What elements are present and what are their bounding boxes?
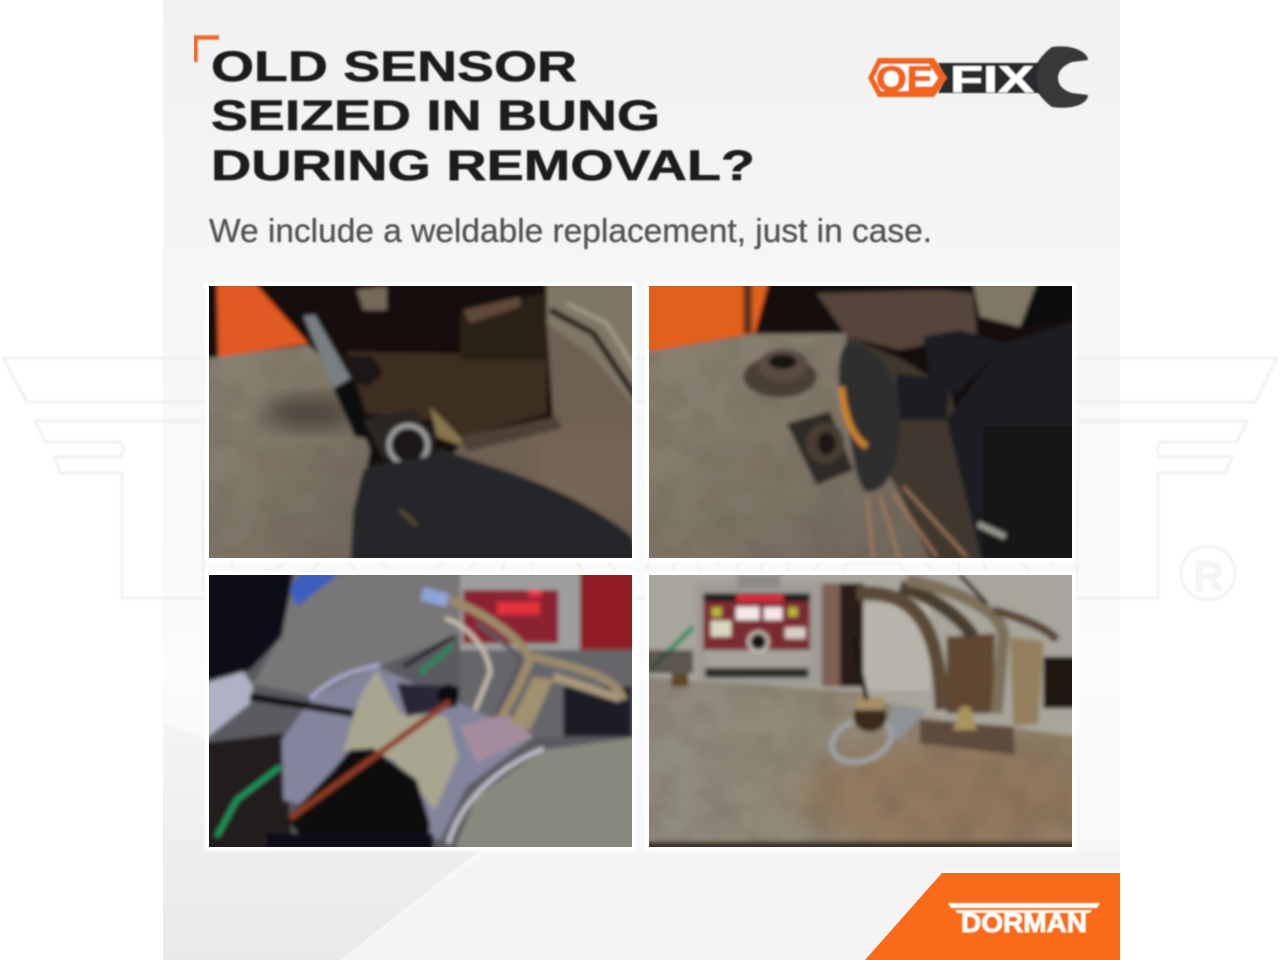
title: DURING REMOVAL? <box>211 142 755 190</box>
accent bracket <box>196 38 219 62</box>
background panel <box>163 0 1120 960</box>
title: OLD SENSOR <box>211 43 577 91</box>
orange corner panel <box>865 870 1120 960</box>
FIX band <box>938 59 1040 100</box>
icon: wrench <box>1030 46 1088 108</box>
Dorman logo: DORMAN <box>961 908 1087 938</box>
photo 2: grinding off the bung <box>640 280 1080 567</box>
OE badge <box>868 58 947 99</box>
title: SEIZED IN BUNG <box>211 92 660 140</box>
Dorman logo <box>948 903 1100 938</box>
FIX band: FIX <box>950 59 1034 100</box>
title <box>211 43 755 190</box>
photo 4: finished weld <box>640 570 1080 857</box>
watermark: Dorman logo outline: R <box>1194 555 1223 599</box>
OE FIX logo <box>868 46 1088 108</box>
photo 1: removing seized sensor <box>200 280 640 567</box>
watermark: Dorman logo outline: DORMAN <box>190 445 1090 624</box>
OE badge: OE <box>876 60 933 99</box>
photo white borders <box>205 282 1076 851</box>
photo 3: welding the replacement bung <box>200 570 640 857</box>
watermark: Dorman logo outline <box>3 358 1277 624</box>
subtitle: We include a weldable replacement, just in case. <box>209 212 932 249</box>
